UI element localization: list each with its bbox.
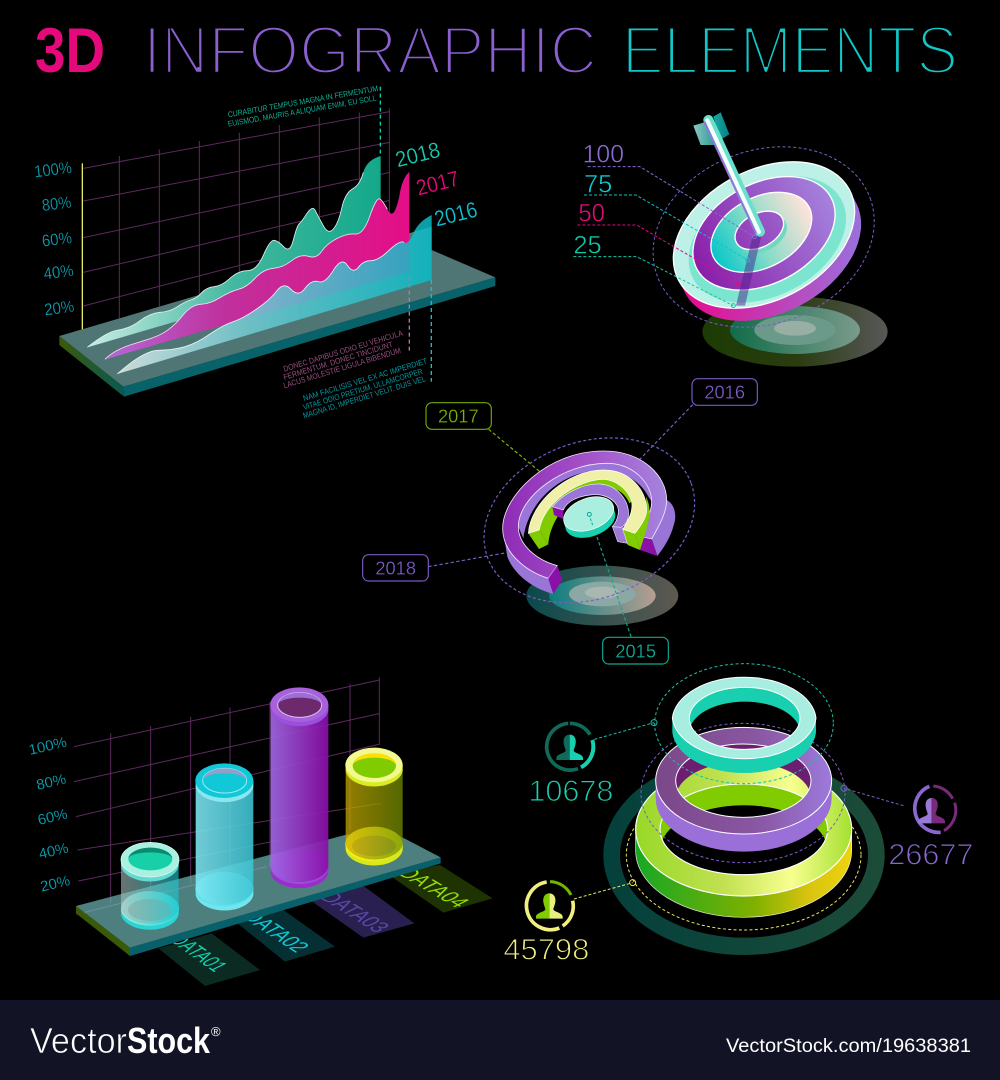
percent axis labels: 60% xyxy=(36,807,69,829)
base dark ring xyxy=(603,755,885,955)
target shadow xyxy=(702,297,888,367)
label strip DATA02: DATA02 xyxy=(237,907,315,956)
series label 2017: 2017 xyxy=(413,166,462,201)
cylinder DATA01 xyxy=(121,842,179,930)
ring 2017 xyxy=(528,470,650,550)
percent axis labels: 20% xyxy=(43,297,75,319)
ring 2016 xyxy=(552,484,628,543)
arrow shadow on target xyxy=(736,236,761,306)
center disc 2015 xyxy=(559,490,620,544)
callout 45798 xyxy=(503,880,636,966)
dashed ring xyxy=(461,410,718,631)
percent axis labels: 40% xyxy=(43,261,75,283)
callout 25 xyxy=(573,231,735,308)
label strip DATA01: DATA01 xyxy=(164,931,234,975)
callout 75: 75 xyxy=(584,170,612,198)
label box 2016: 2016 xyxy=(704,382,745,403)
percent axis labels: 100% xyxy=(27,735,69,759)
label box 2018: 2018 xyxy=(375,557,416,578)
label box 2015: 2015 xyxy=(615,640,656,661)
radial shadow xyxy=(526,566,678,626)
title word: ELEMENTS: ELEMENTS xyxy=(622,13,958,89)
label box 2015 xyxy=(603,637,668,664)
cylinder DATA04 xyxy=(345,748,403,865)
callout 50 xyxy=(577,200,740,286)
title word: 3D: 3D xyxy=(35,16,105,86)
footer bar xyxy=(0,1000,1000,1080)
percent axis labels: 80% xyxy=(35,772,68,794)
icon: arrow xyxy=(693,112,760,233)
image id: VectorStock.com/19638381 xyxy=(726,1036,971,1057)
percent axis labels xyxy=(33,158,75,319)
label box 2016 xyxy=(692,379,757,405)
label strip DATA03: DATA03 xyxy=(314,888,396,936)
dashed ring xyxy=(628,117,900,357)
panel: target chart xyxy=(573,112,900,367)
dashed ring purple xyxy=(641,723,845,863)
leader lines xyxy=(428,405,693,637)
callout 26677: 26677 xyxy=(888,838,973,871)
teal ring xyxy=(672,677,816,773)
percent axis labels: 20% xyxy=(39,873,72,896)
callout 50: 50 xyxy=(578,200,605,228)
callout 45798: 45798 xyxy=(503,933,589,966)
logo wordmark bold: Stock xyxy=(127,1020,211,1061)
target side wall xyxy=(679,190,861,321)
series label 2018: 2018 xyxy=(393,137,443,172)
callout 100 xyxy=(583,140,756,239)
chart grid xyxy=(83,108,390,327)
percent axis labels xyxy=(27,735,72,896)
green ring xyxy=(636,763,852,917)
panel: stacked rings chart xyxy=(503,664,973,966)
callout 10678: 10678 xyxy=(528,775,613,808)
area 2017 xyxy=(105,172,409,359)
cylinder DATA02 xyxy=(195,763,253,910)
callout 25: 25 xyxy=(573,231,602,259)
panel: area chart xyxy=(33,84,495,420)
purple ring xyxy=(656,727,832,852)
note: 2016: VITAE ODIO PRETIUM, ULLAMCORPER xyxy=(302,367,424,412)
label box 2017 xyxy=(426,403,491,429)
axis line xyxy=(80,163,84,336)
note: 2017: DONEC DAPIBUS ODIO EU VEHICULA xyxy=(282,328,404,374)
platform xyxy=(59,227,495,397)
logo wordmark: Vector xyxy=(30,1020,127,1061)
callout 26677 xyxy=(841,785,973,871)
label box 2017: 2017 xyxy=(438,406,479,427)
label box 2018 xyxy=(363,555,428,581)
series label 2016: 2016 xyxy=(432,197,480,232)
percent axis labels: 40% xyxy=(37,841,70,863)
chart grid xyxy=(74,677,382,914)
callout 75 xyxy=(584,170,750,262)
note: 2017: FERMENTUM. DONEC TINCIDUNT xyxy=(282,340,394,382)
cylinder DATA03 xyxy=(270,687,328,888)
note: 2018: CURABITUR TEMPUS MAGNA IN FERMENTUM xyxy=(227,84,379,119)
note: 2017: LACUS MOLESTIE LIGULA BIBENDUM xyxy=(282,346,402,390)
note: 2018: EUISMOD. MAURIS A ALIQUAM ENIM, EU SOLL xyxy=(227,94,378,129)
percent axis labels: 100% xyxy=(33,158,73,181)
area 2018 xyxy=(87,156,381,347)
title word: INFOGRAPHIC: INFOGRAPHIC xyxy=(143,13,597,89)
percent axis labels: 80% xyxy=(41,193,72,215)
panel: cylinder bar chart xyxy=(27,677,493,986)
callout 100: 100 xyxy=(583,140,624,168)
platform xyxy=(76,830,441,956)
percent axis labels: 60% xyxy=(41,228,73,251)
label strip DATA04: DATA04 xyxy=(392,864,476,911)
panel: radial bar chart xyxy=(363,379,757,664)
area 2016 xyxy=(117,215,432,374)
note: 2016: NAM FACILISIS VEL EX AC IMPERDIET xyxy=(302,356,428,403)
target rings xyxy=(648,132,880,338)
callout 10678 xyxy=(528,720,657,808)
registered mark: ® xyxy=(211,1024,221,1039)
note: 2016: MAGNA ID, IMPERDIET VELIT. DUIS VEL xyxy=(302,374,427,420)
dashed leader lines xyxy=(380,87,431,382)
ring 2018 xyxy=(503,451,675,594)
dashed ring teal xyxy=(655,664,833,784)
title xyxy=(35,13,958,89)
